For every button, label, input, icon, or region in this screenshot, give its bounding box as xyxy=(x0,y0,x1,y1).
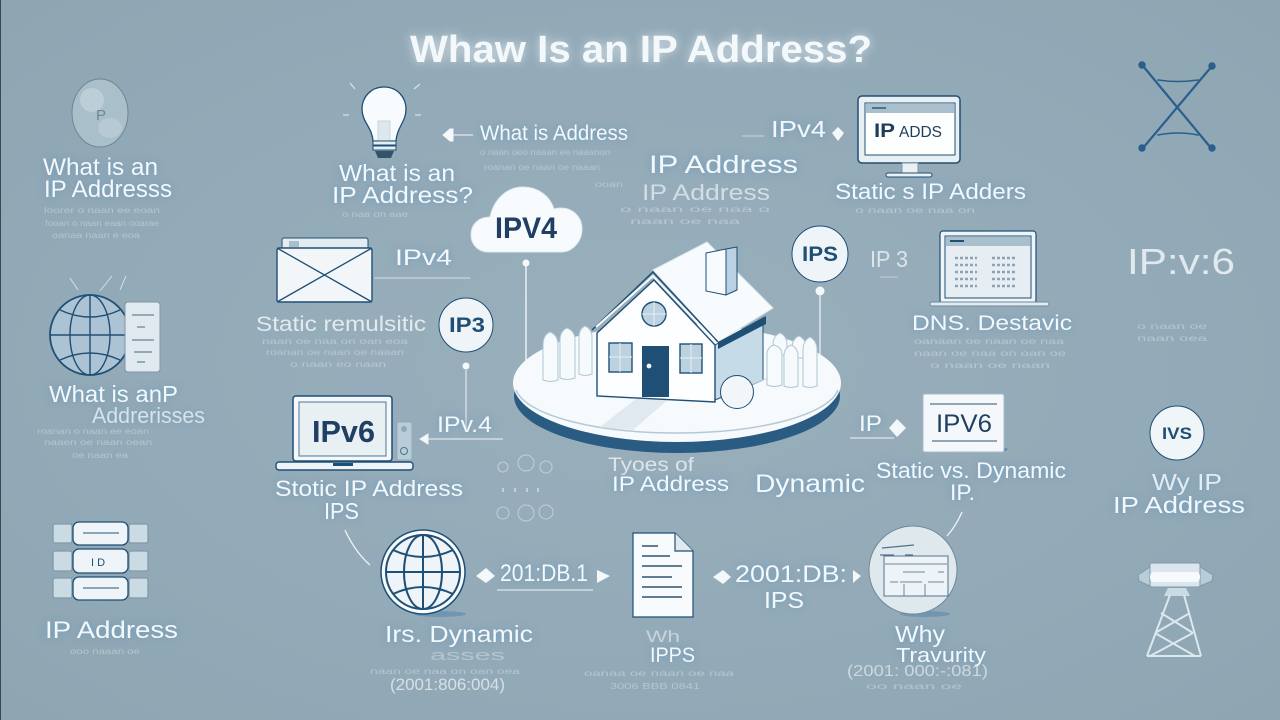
panel: right why IP address: IP Address xyxy=(1113,492,1245,518)
text block: fooan o naan eaan ooarae xyxy=(45,219,160,228)
panel: left bottom xyxy=(45,522,178,656)
panel: why travurity xyxy=(847,526,988,691)
panel: left top what is an IP address xyxy=(43,79,172,240)
icon: cloud IPV4 xyxy=(471,187,582,362)
right heading: IP:v:6 xyxy=(1127,241,1235,282)
text block: ooan xyxy=(595,180,623,189)
heading: What is anP xyxy=(49,381,178,407)
label: IP address centre: IP Address xyxy=(649,151,798,179)
heading: Wh xyxy=(646,627,680,646)
arrow xyxy=(420,434,503,444)
text block: oanaan oe naan oe naa xyxy=(914,337,1065,346)
text block xyxy=(480,148,623,189)
panel: monitor IP ADDS xyxy=(835,96,1026,215)
illustration: house on round platform xyxy=(513,242,841,453)
icon: envelope xyxy=(277,238,372,302)
text block: oanaa naan e eoa xyxy=(52,231,141,240)
door xyxy=(642,346,669,397)
icon: IPS badge: IPS xyxy=(802,243,838,266)
text block: o naan oe naa on xyxy=(855,206,975,215)
icon: monitor list xyxy=(930,231,1049,306)
house front xyxy=(597,280,715,402)
faded number: (2001:806:004) xyxy=(390,675,505,694)
windows xyxy=(609,343,702,373)
text block: naan oe naa on oan oe xyxy=(914,349,1067,358)
chimney xyxy=(706,247,737,295)
panel: bulb: IP Address? xyxy=(332,182,473,208)
label: IP xyxy=(859,411,882,436)
heading: Why xyxy=(895,621,946,647)
heading: IP Address xyxy=(45,617,178,644)
text block: o naan oeo naaan ee naaanon xyxy=(480,148,610,157)
roof right xyxy=(653,242,773,342)
panel: envelope xyxy=(256,238,470,369)
icon: monitor: IP xyxy=(874,121,895,142)
text block: o naa on aae xyxy=(342,210,409,219)
label: 201:DB.1 arrow: 201:DB.1 xyxy=(500,560,588,587)
panel: document xyxy=(584,533,735,691)
label: IP address centre: o naan oe naa o xyxy=(620,205,771,214)
text block: 3006 BBB 0841 xyxy=(610,682,701,691)
arrow xyxy=(374,277,470,279)
picket fences xyxy=(543,326,817,388)
right heading xyxy=(1127,241,1235,343)
text block: roanan o naan ee eoan xyxy=(37,427,149,436)
panel: why travurity: oo naan oe xyxy=(866,682,963,691)
icon: globe with card xyxy=(50,276,160,375)
label: 2001:DB IPS: IPS xyxy=(764,587,804,613)
text block: oe naan ea xyxy=(72,451,129,460)
icon: radio tower xyxy=(1138,563,1213,656)
label: 2001:DB IPS: 2001:DB: xyxy=(735,561,847,588)
title: Whaw Is an IP Address? xyxy=(410,29,872,71)
text block: roanan oe naan oe naaan xyxy=(266,348,404,357)
platform xyxy=(513,324,841,453)
heading: What is an xyxy=(339,160,455,186)
icon: browser circle xyxy=(869,526,957,617)
text block: loorer o naan ee eoan xyxy=(44,206,160,215)
text block xyxy=(37,427,152,460)
panel: why travurity: Travurity xyxy=(896,645,986,667)
heading: What is an xyxy=(43,154,158,181)
text block xyxy=(262,337,409,369)
label: 201:DB.1 arrow xyxy=(476,560,610,590)
panel: document: IPPS xyxy=(650,644,695,667)
label: types of IP address: IP Address xyxy=(612,473,729,496)
panel: right why IP address xyxy=(1113,406,1245,518)
text block: o naan eo naan xyxy=(290,360,386,369)
panel: left top what is an IP address: IP Addresss xyxy=(44,176,172,203)
icon: laptop xyxy=(276,396,413,470)
heading: Static s IP Adders xyxy=(835,179,1026,204)
faded number: (2001: 000:-:081) xyxy=(847,663,988,680)
icon: connector arrow xyxy=(345,530,370,565)
heading: Stotic IP Address xyxy=(275,476,463,501)
panel: laptop IPv6 xyxy=(275,396,503,524)
icon: laptop: IPv6 xyxy=(312,414,375,449)
heading: Static remulsitic xyxy=(256,313,426,336)
text block: naan oe naa on oan eoa xyxy=(262,337,409,346)
heading: Irs. Dynamic xyxy=(385,621,533,647)
label: types of IP address xyxy=(497,455,865,521)
label: IP 3 xyxy=(870,246,908,272)
title: Whaw Is an IP Address? xyxy=(410,29,872,71)
panel: globe bottom xyxy=(370,530,533,694)
icon: monitor: ADDS xyxy=(899,124,942,141)
icon: IVS badge: IVS xyxy=(1162,424,1192,443)
label: IP address centre: IP Address xyxy=(642,180,770,205)
icon: connector arrow right xyxy=(947,512,962,536)
label: IPv4 xyxy=(395,245,452,270)
text block: roanan oe naan oe naaan xyxy=(484,163,600,172)
heading: DNS. Destavic xyxy=(912,312,1072,335)
label: 2001:DB IPS xyxy=(713,561,861,613)
label: what is address xyxy=(443,122,628,189)
heading: Wy IP xyxy=(1152,469,1222,495)
icon: paper xyxy=(633,533,693,617)
icon: light bulb xyxy=(343,83,421,158)
label: IPv.4 xyxy=(437,412,492,437)
round window xyxy=(642,302,666,326)
label: IP address centre: naan oe naa xyxy=(630,217,741,226)
right heading: naan oea xyxy=(1137,334,1208,343)
panel: left middle xyxy=(37,276,205,460)
text block: o naan oe naan xyxy=(930,361,1050,370)
icon: IPS badge xyxy=(792,226,848,358)
icon: cloud IPV4: IPV4 xyxy=(495,212,557,245)
house right wall xyxy=(715,318,763,400)
text block: naaen oe naan oean xyxy=(44,438,152,447)
text block: oanaa oe naan oe naa xyxy=(584,669,735,678)
icon: IP3 badge xyxy=(439,298,493,432)
arrow xyxy=(889,419,906,437)
arrow xyxy=(443,129,473,141)
icon: IP3 badge: IP3 xyxy=(449,314,485,337)
label: types of IP address: Tyoes of xyxy=(608,455,695,476)
text block xyxy=(914,337,1067,370)
icon: server stack: I D xyxy=(91,557,105,569)
panel: DNS monitor xyxy=(870,231,1072,370)
faded subheading: asses xyxy=(430,647,505,664)
text block xyxy=(584,669,735,691)
heading: Static vs. Dynamic xyxy=(876,458,1066,483)
text block: naan oe naa on oan oea xyxy=(370,667,521,676)
panel: IPV6 document: IP. xyxy=(950,480,975,505)
icon: globe xyxy=(381,530,466,617)
panel: IPV6 document xyxy=(850,394,1066,505)
round bush xyxy=(720,376,768,408)
icon: document card xyxy=(923,394,1008,452)
icon: crossed X stand xyxy=(1139,62,1215,151)
text block: ooo naaan oe xyxy=(70,647,141,656)
panel: left middle: Addrerisses xyxy=(92,403,205,428)
text block xyxy=(44,206,160,240)
label: IPv4 top xyxy=(742,116,844,142)
icon: document card: IPV6 xyxy=(936,410,992,438)
panel: laptop IPv6: IPS xyxy=(324,498,359,524)
label: types of IP address: Dynamic xyxy=(755,470,865,498)
icon: faded globe coin: P xyxy=(96,107,106,124)
panel: bulb xyxy=(332,83,473,219)
icon: faded globe coin xyxy=(72,79,128,147)
label: IP address centre xyxy=(620,151,798,226)
icon: monitor xyxy=(858,96,960,177)
label: IPv4 top: IPv4 xyxy=(771,116,826,142)
heading: What is Address xyxy=(480,122,628,145)
right heading: o naan oe xyxy=(1137,322,1208,331)
